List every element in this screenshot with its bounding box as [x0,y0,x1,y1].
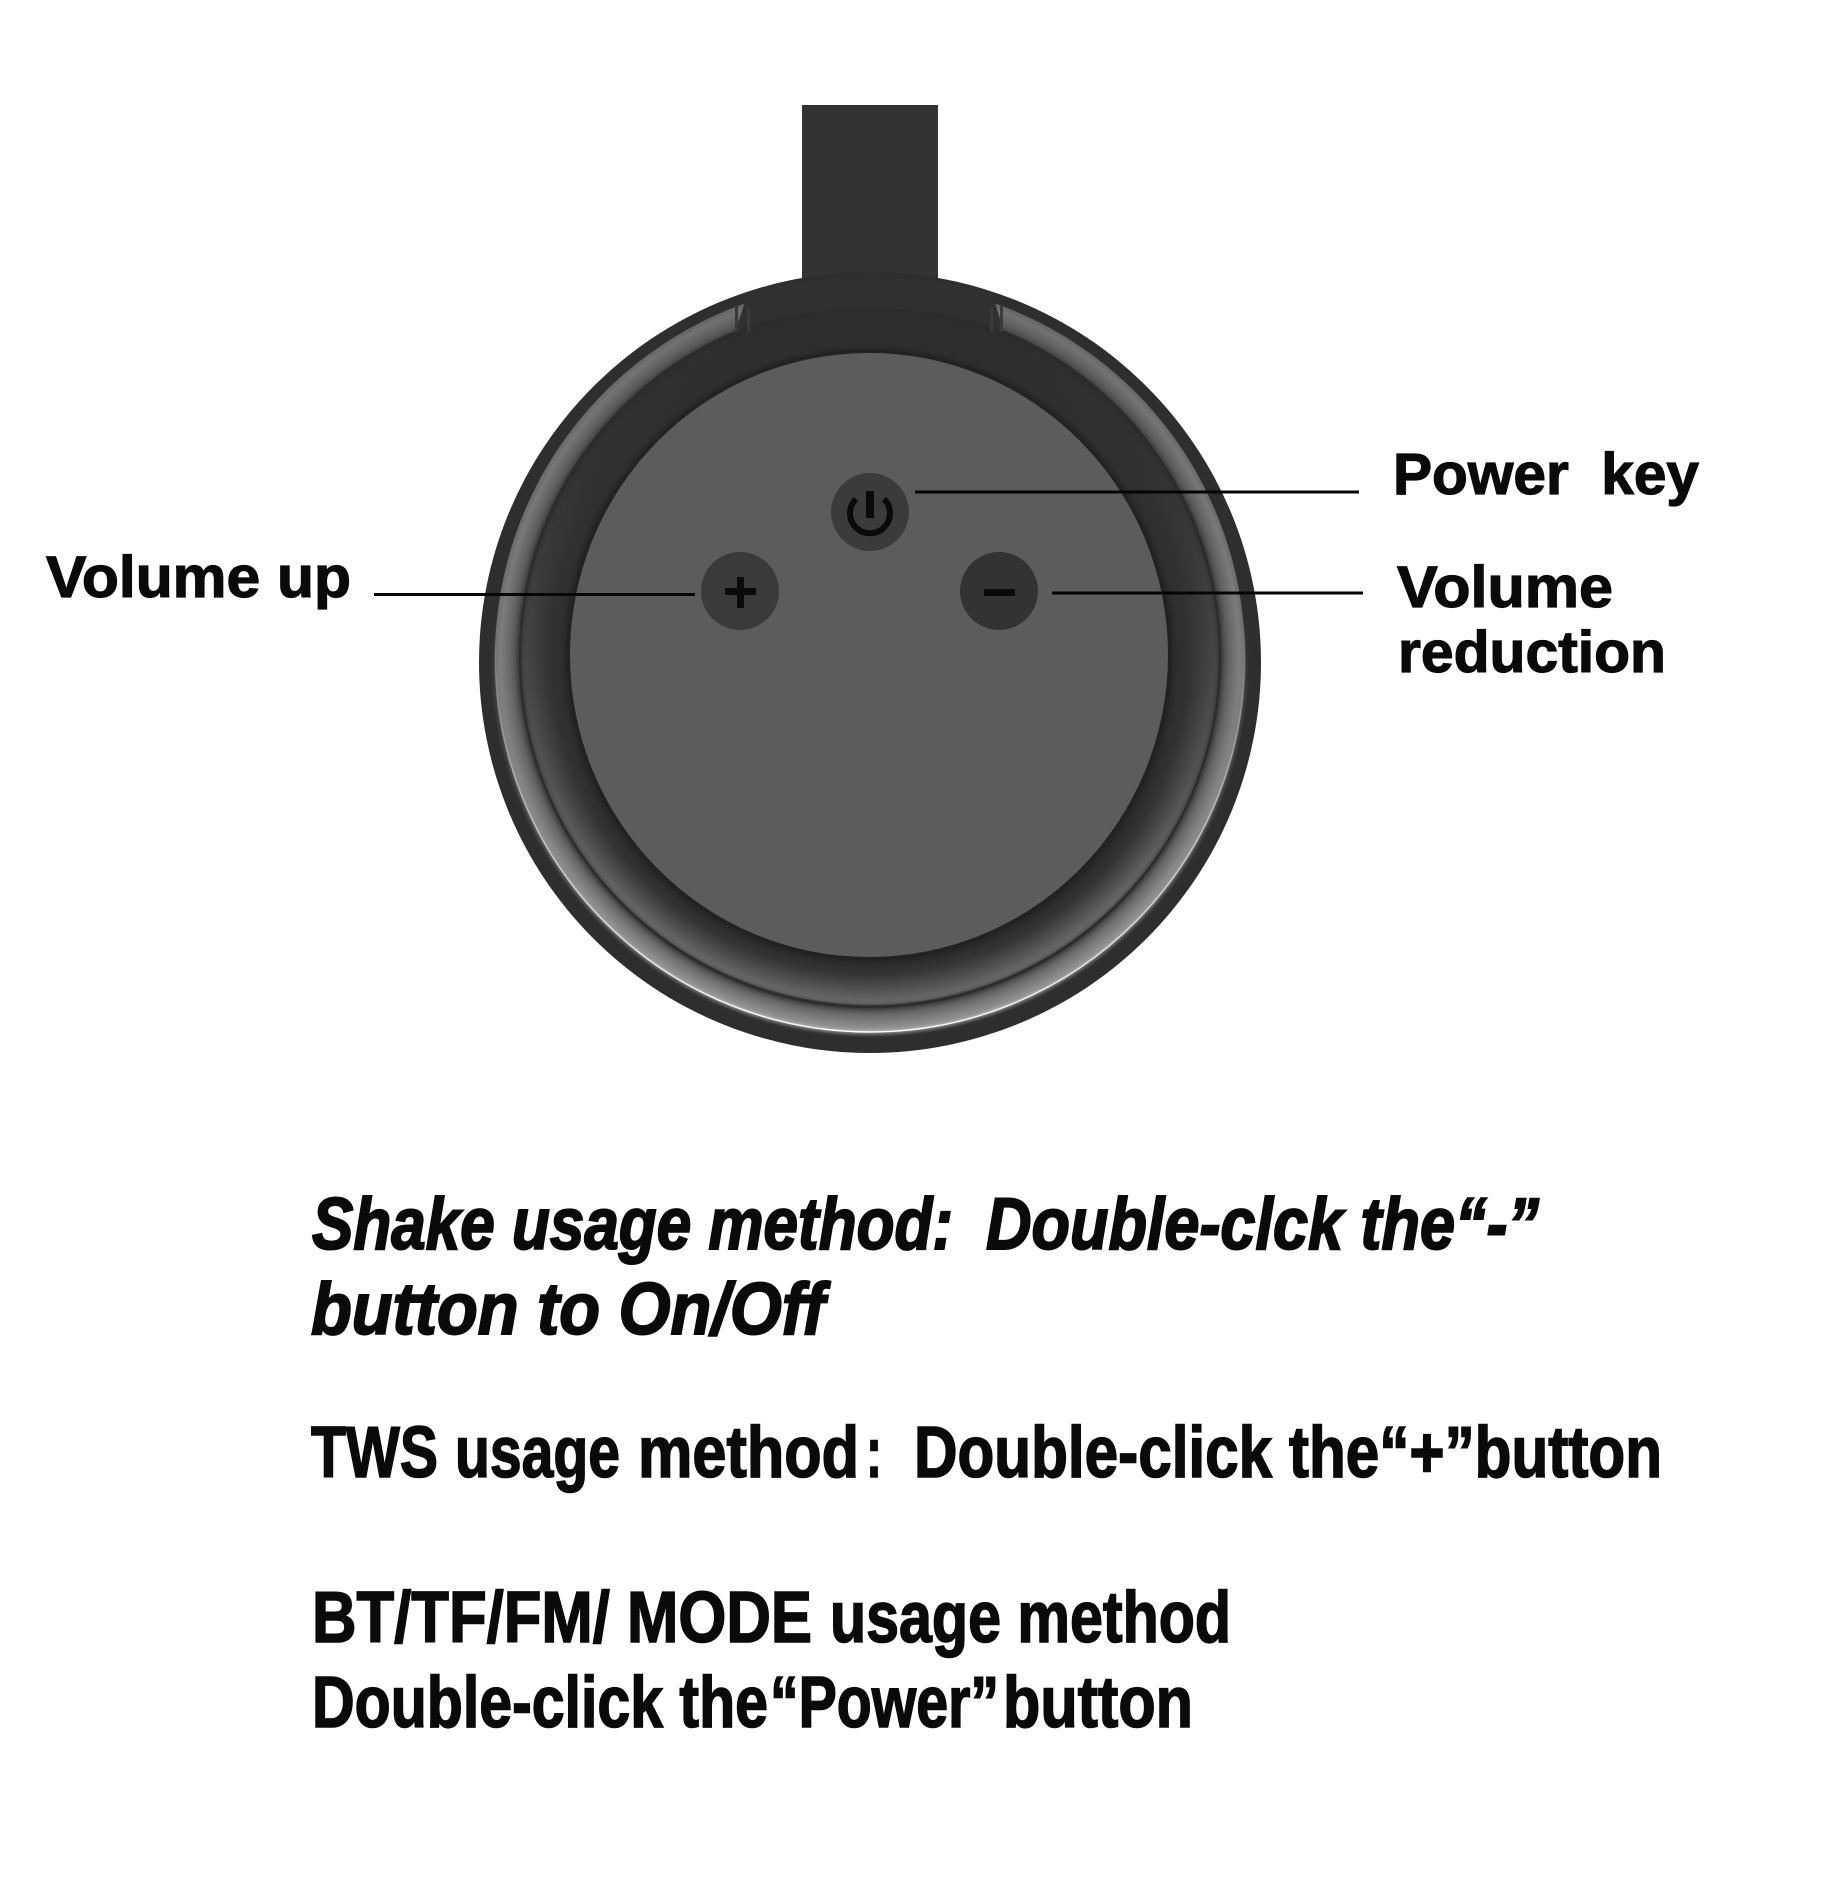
instruction: mode usage: usage method [830,1578,1231,1658]
instruction: shake usage: button to On/Off [311,1269,831,1350]
label: volume reduction: Volume [1397,555,1613,620]
volume up button [701,552,779,630]
instruction: TWS usage: method [638,1413,859,1493]
strap [802,105,938,295]
instruction: mode usage: Double-click the [312,1663,768,1743]
instruction: shake usage [311,1184,1539,1350]
label: power key: Power key [1393,442,1699,507]
label: volume reduction: reduction [1398,620,1666,685]
leader line: volume reduction [1052,592,1363,594]
instruction: shake usage: Double-clck the“-” [986,1184,1539,1265]
outer rim [479,272,1261,1053]
power button [831,473,909,551]
label: volume reduction [1397,555,1666,685]
instruction: TWS usage: usage [455,1413,620,1493]
instruction: TWS usage: Double-click the“+”button [914,1413,1662,1493]
instruction: TWS usage [311,1413,1662,1493]
volume down button [960,552,1038,630]
centre panel [568,351,1170,959]
instruction: TWS usage: : [866,1413,882,1493]
instruction: TWS usage: TWS [311,1413,438,1493]
leader line: power key [915,490,1359,494]
leader line: volume up [374,593,695,596]
speaker illustration [479,105,1261,1053]
inner dark band [520,305,1220,1007]
instruction: mode usage: BT/TF/FM/ MODE [312,1578,812,1658]
instruction: mode usage [312,1578,1231,1743]
instruction: mode usage: button [1003,1663,1193,1743]
instruction: shake usage: Shake usage method: [312,1184,953,1265]
outer grey band [495,282,1245,1032]
label: volume up: Volume up [46,545,351,610]
top clip band [735,277,1003,332]
instruction: mode usage: “Power” [770,1663,999,1743]
